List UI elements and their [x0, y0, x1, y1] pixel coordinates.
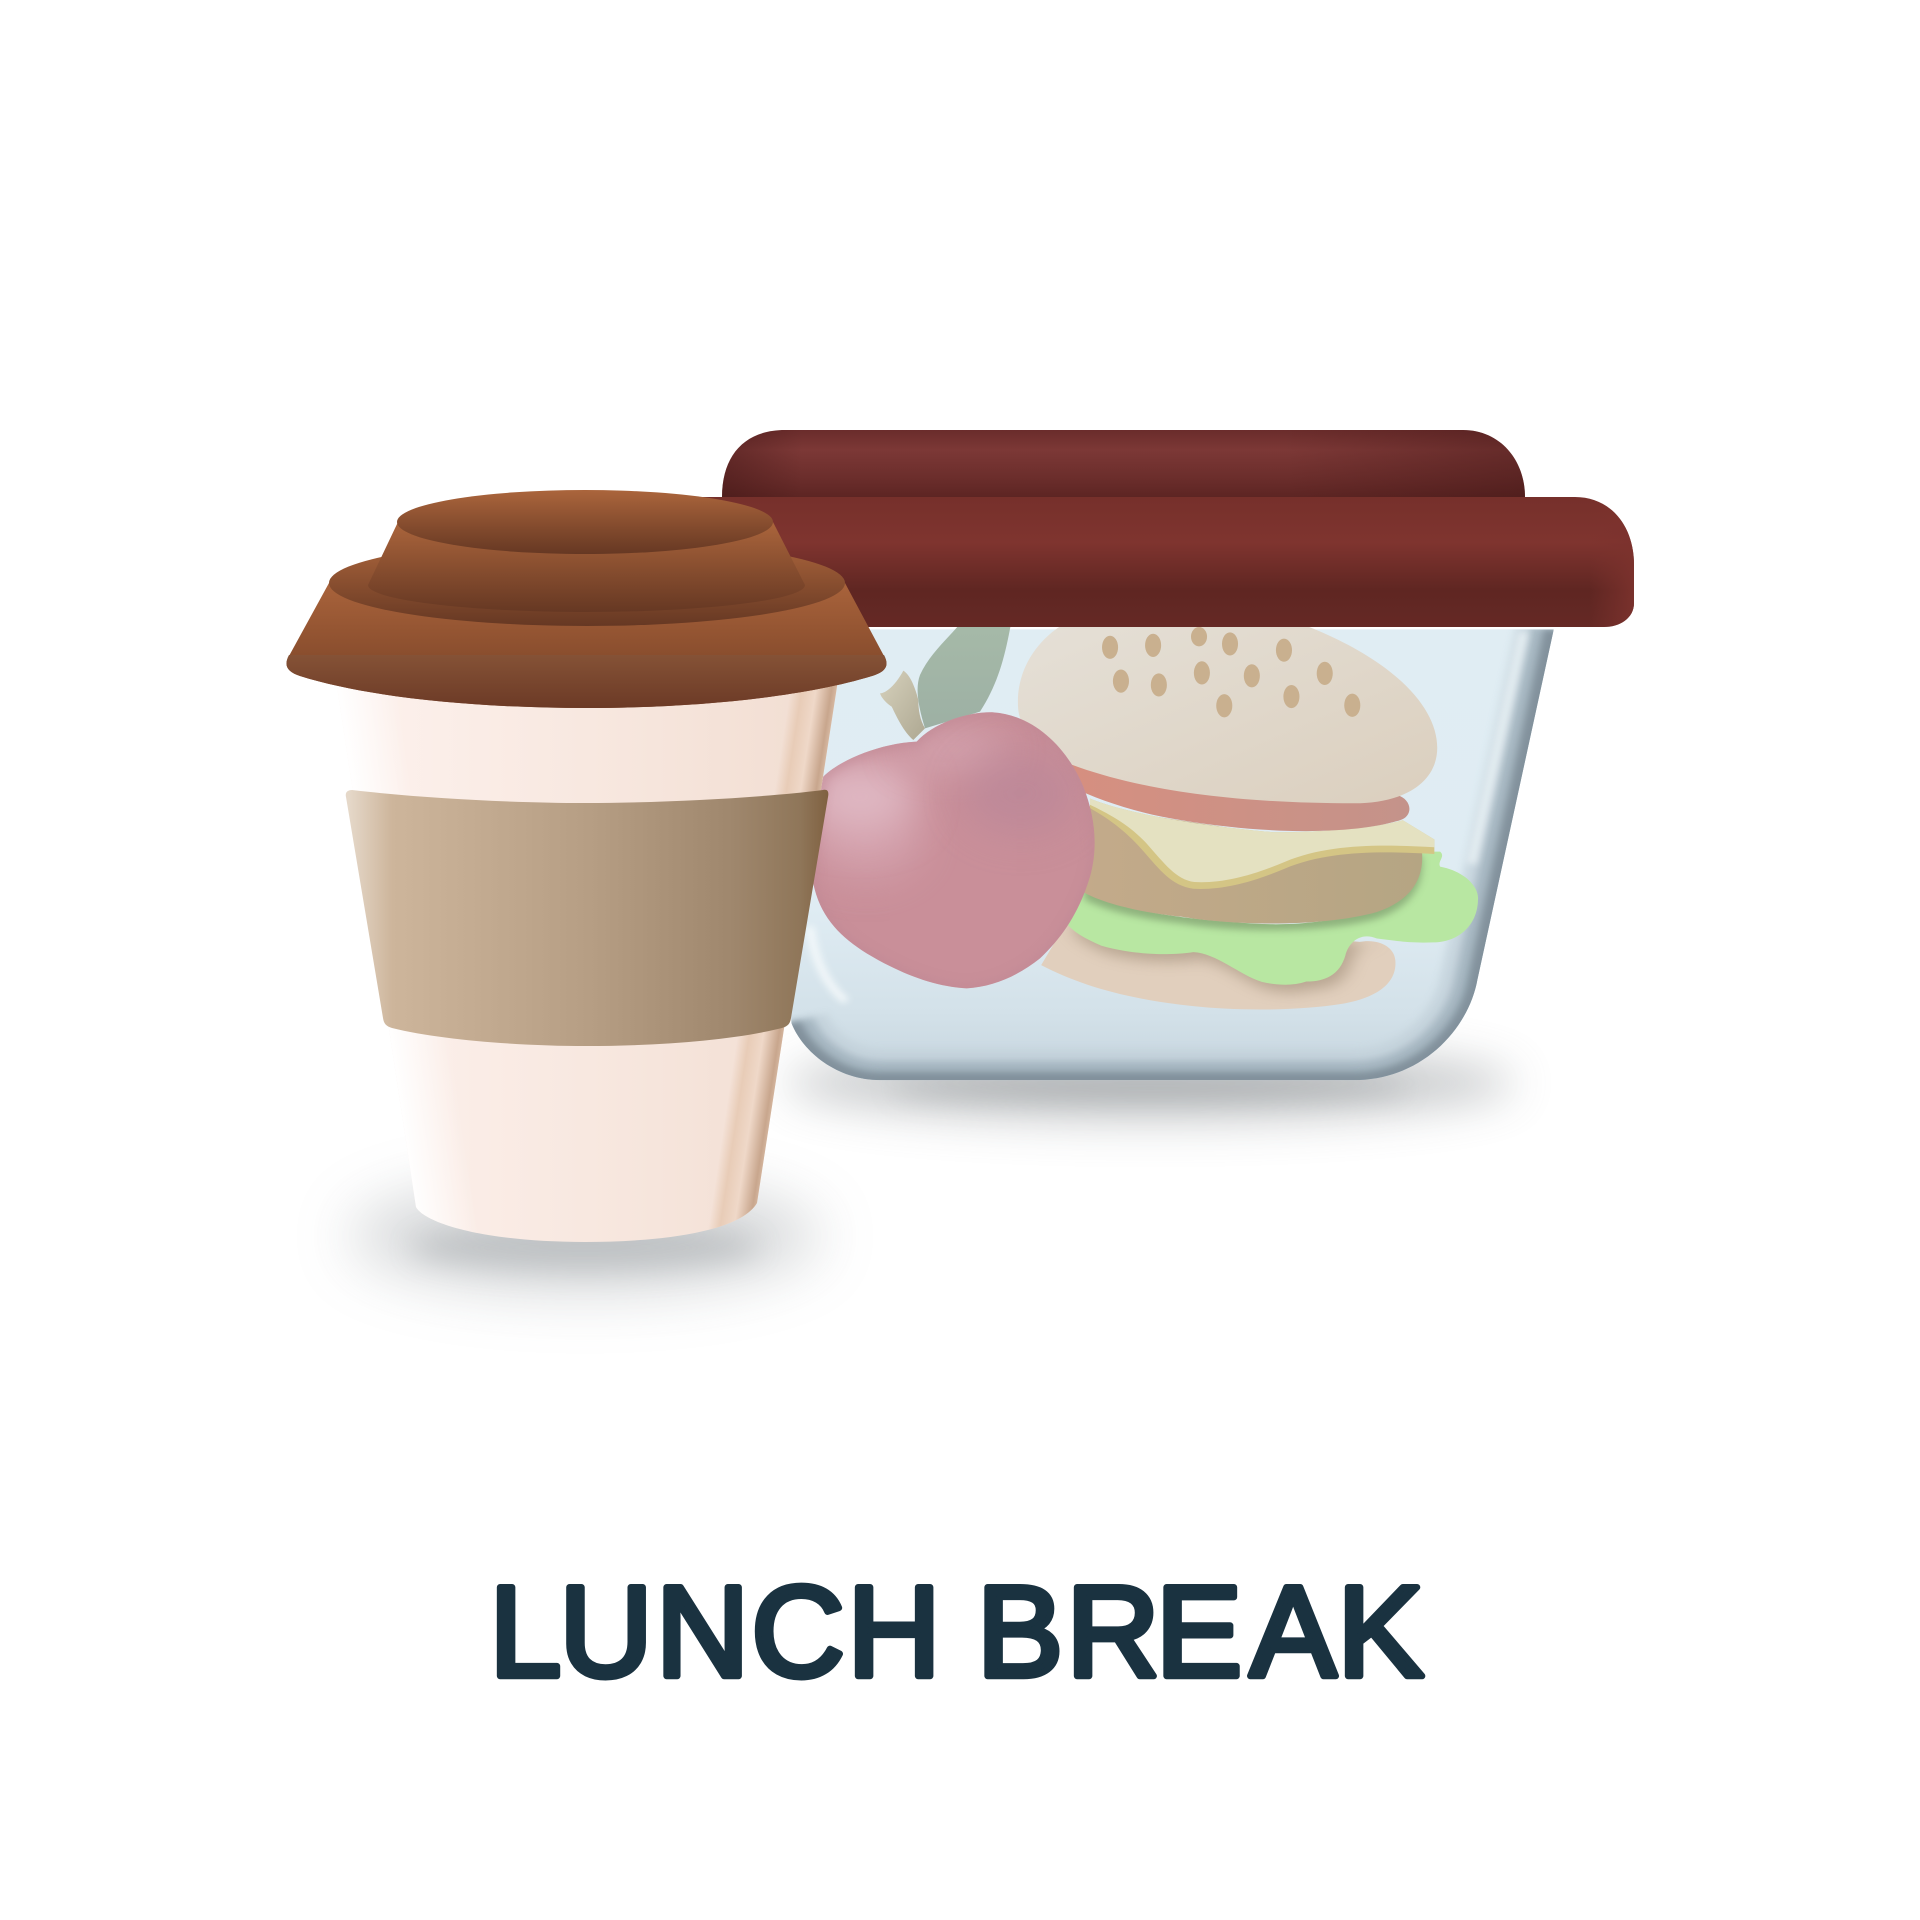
burger	[1018, 622, 1478, 1010]
patty shadow	[1082, 854, 1426, 934]
lettuce	[1067, 852, 1478, 985]
shadow: lunch box	[785, 1045, 1515, 1121]
sesame seeds	[1102, 627, 1360, 717]
lid brim	[286, 583, 887, 708]
lettuce shadow	[1069, 928, 1366, 998]
apple leaf	[918, 620, 1012, 728]
tomato	[1070, 763, 1409, 831]
cup body	[362, 685, 838, 1242]
title: LUNCH BREAK	[490, 1560, 1424, 1704]
lower lid	[600, 497, 1634, 627]
cup sleeve	[346, 790, 828, 1046]
coffee cup	[286, 490, 887, 1260]
bottom bun	[1041, 922, 1395, 1010]
upper lid	[722, 430, 1525, 497]
illustration: lunch break	[286, 430, 1634, 1680]
apple fruit	[813, 712, 1095, 988]
lid second tier	[368, 522, 805, 612]
box body	[769, 629, 1554, 1080]
lid top ellipse	[397, 490, 773, 554]
cup lid	[286, 490, 887, 708]
lunch box	[600, 430, 1634, 1080]
cheese	[1090, 798, 1434, 889]
apple stem	[880, 671, 925, 740]
shadow: coffee cup	[350, 1181, 820, 1291]
lid third ring	[329, 540, 845, 626]
top bun	[1018, 622, 1437, 803]
apple	[803, 620, 1095, 988]
patty	[1084, 806, 1422, 924]
